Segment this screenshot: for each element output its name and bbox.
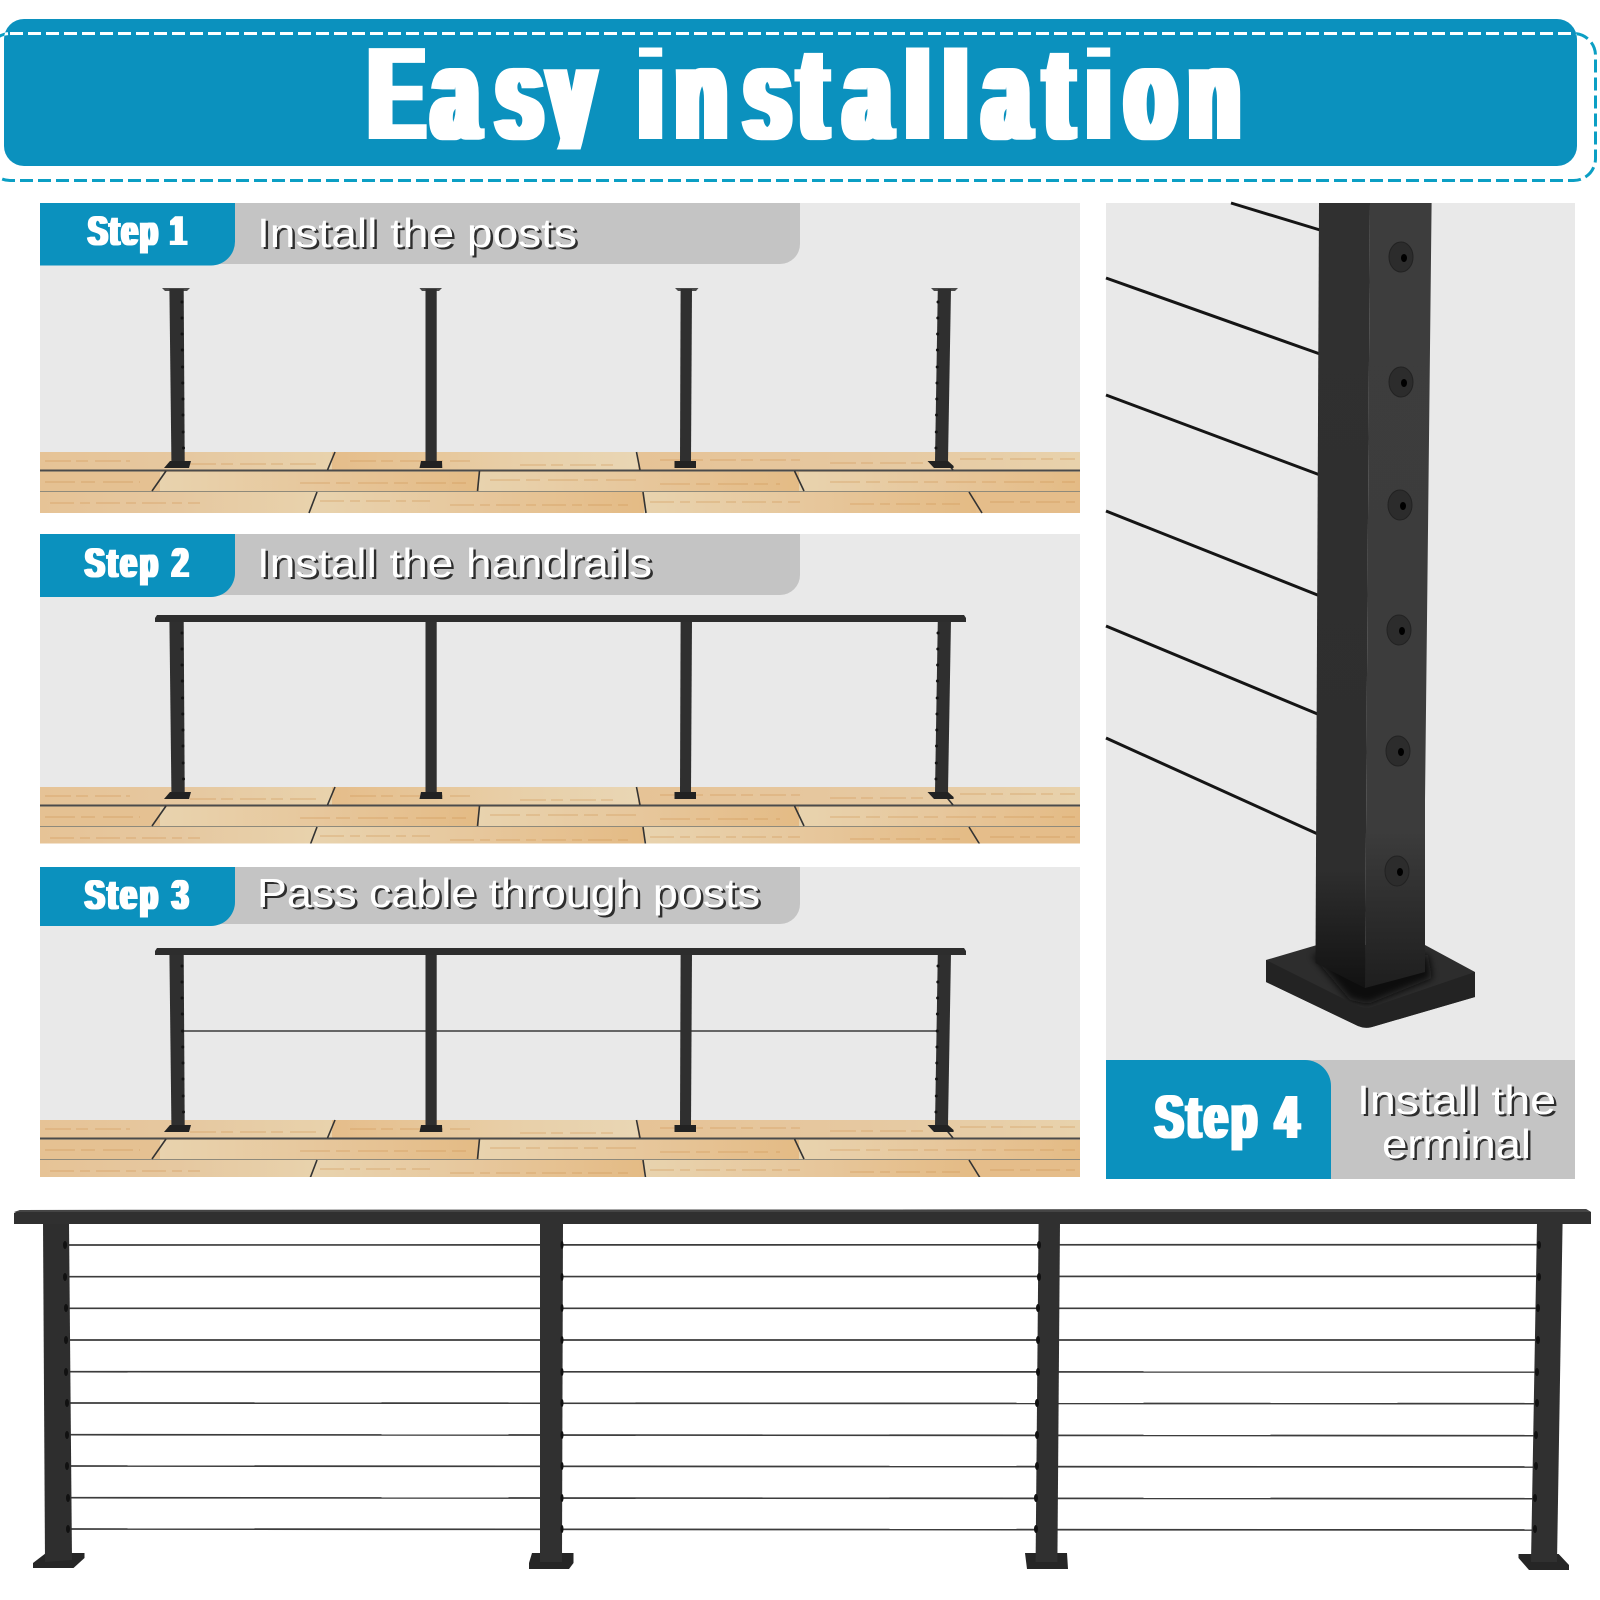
step 3 posts	[162, 952, 958, 1132]
post right face	[1365, 203, 1432, 988]
title text: Easy installation	[369, 21, 1239, 168]
post 2	[529, 1222, 574, 1569]
step 4 caption text: Install the	[1357, 1077, 1556, 1123]
panel: step 3	[40, 867, 1080, 1181]
step 1 grey caption bar	[200, 203, 800, 264]
step 4 cables	[1106, 203, 1320, 835]
post 3	[1025, 1222, 1068, 1569]
step 2 posts	[162, 619, 958, 799]
top rail	[14, 1209, 1591, 1224]
cable terminal bolts	[1385, 242, 1413, 886]
step 4 close-up post	[1266, 203, 1475, 1028]
step 1 caption text: Install the posts	[257, 210, 577, 256]
step 4 grey caption bar	[1300, 1060, 1575, 1179]
step 3 caption text: Pass cable through posts	[257, 870, 760, 916]
step 1 posts	[162, 288, 958, 468]
post 4	[1518, 1222, 1569, 1570]
finished railing	[14, 1209, 1591, 1570]
step 3 blue badge	[40, 867, 235, 926]
panel: step 2	[40, 534, 1080, 848]
title banner	[0, 19, 1596, 180]
step 2 caption text: Install the handrails	[257, 540, 652, 586]
step 2 handrail	[155, 615, 966, 622]
step 4 blue badge	[1106, 1060, 1331, 1179]
railing cables	[65, 1245, 1539, 1530]
panel: step 1	[40, 203, 1080, 513]
step 4 badge text: Step 4	[1155, 1084, 1299, 1152]
step 3 handrail	[155, 948, 966, 955]
post left face	[1316, 203, 1370, 988]
step 2 badge text: Step 2	[85, 539, 188, 586]
step 3 grey caption bar	[200, 867, 800, 924]
mounting plate	[1266, 945, 1475, 1028]
step 2 blue badge	[40, 534, 235, 597]
step 4 caption text	[1357, 1077, 1556, 1167]
post 1	[33, 1222, 84, 1568]
panel: step 4	[1106, 203, 1575, 1179]
step 3 cable	[183, 1030, 938, 1032]
step 4 caption text: erminal	[1382, 1121, 1531, 1167]
step 3 badge text: Step 3	[85, 871, 188, 918]
step 2 grey caption bar	[200, 534, 800, 595]
step 1 badge text: Step 1	[88, 207, 186, 254]
step 1 blue badge	[40, 203, 235, 266]
